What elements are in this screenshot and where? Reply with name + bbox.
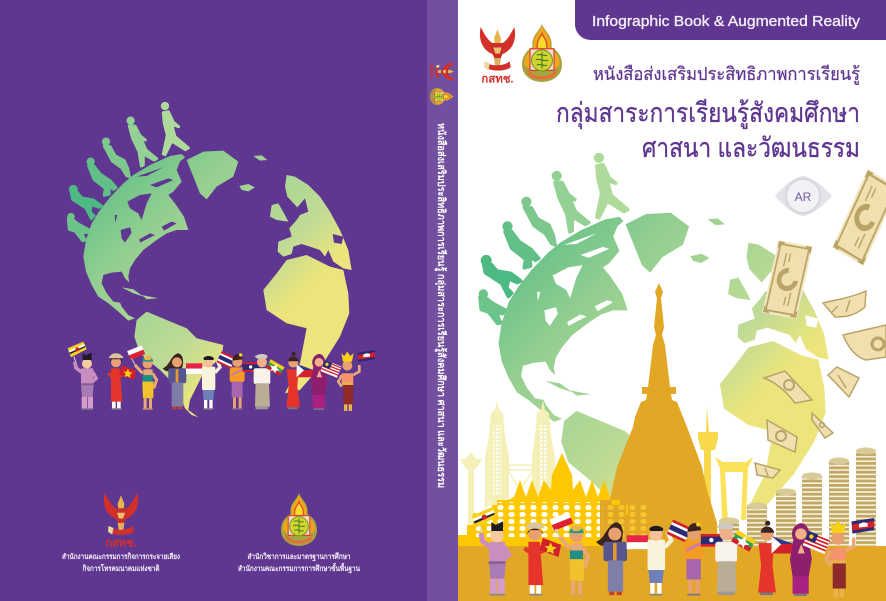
- icon: AR eye badge: [775, 176, 832, 216]
- text: ONBTC office name: กิจการโทรคมนาคมแห่งชาติ: [82, 563, 160, 573]
- banknote: small: [812, 413, 833, 438]
- landmark: airport tower: [460, 452, 482, 530]
- logo: spine seal: [430, 88, 454, 105]
- illustration: flying banknotes: [755, 170, 886, 478]
- landmark: KL tower: [698, 407, 718, 525]
- text: ONBTC office name: [62, 552, 180, 573]
- person: Malaysia: [311, 354, 342, 410]
- logo: Office of Basic Education seal, front cover: [522, 24, 562, 82]
- banknote: curled upper: [823, 291, 866, 317]
- person: Vietnam: [108, 353, 136, 410]
- banknote: curled mid: [764, 371, 812, 403]
- illustration: front cover globe with walking figures: [480, 155, 829, 541]
- banknote: bottom: [755, 463, 780, 478]
- panel: front cover background: [458, 0, 886, 601]
- text: Office of Basic Education name: [238, 552, 361, 574]
- text: header tab title: Infographic Book & Augmented Reality: [592, 14, 861, 30]
- logo: ONBTC garuda, front cover: [480, 27, 515, 86]
- text: AR: AR: [795, 190, 812, 204]
- illustration: golden stupa: [600, 283, 718, 546]
- person: Philippines: [286, 352, 313, 409]
- person: Brunei: [68, 342, 96, 410]
- text: spine title: หนังสือส่งเสริมประสิทธิภาพการเรียนรู้ กลุ่มสาระการเรียนรู้สังคมศึกษา ศาสนา และวัฒนธรรม: [434, 123, 448, 488]
- panel: book spine: [427, 0, 458, 601]
- panel: back cover background: [0, 0, 427, 601]
- person: Indonesia: [127, 345, 157, 410]
- person: cream shirt, Thailand flag: [202, 351, 235, 410]
- logo: Office of Basic Education seal, back cover: [281, 493, 317, 546]
- text: Office of Basic Education name: สำนักวิชาการและมาตรฐานการศึกษา: [248, 552, 350, 562]
- logo: spine garuda: [428, 63, 455, 80]
- group: ten ASEAN people with flags, front cover: [472, 507, 874, 597]
- banknote: centre: [763, 241, 812, 318]
- banknote: roll: [828, 367, 859, 397]
- ground band: [458, 546, 886, 601]
- text: ONBTC office name: สำนักงานคณะกรรมการกิจการกระจายเสียง: [62, 552, 180, 561]
- subtitle: หนังสือส่งเสริมประสิทธิภาพการเรียนรู้: [593, 64, 860, 85]
- walking figures evolution: [68, 103, 188, 241]
- person: long hair with jacket, Singapore flag: [163, 353, 202, 409]
- banknote: curled right: [843, 325, 886, 360]
- person: Myanmar: [254, 354, 285, 409]
- landmark: giant swing: [715, 457, 753, 520]
- illustration: temple: [458, 453, 656, 546]
- illustration: coin stacks: [719, 448, 876, 546]
- world map continents: [83, 151, 352, 417]
- group: ten ASEAN people with flags, back cover: [68, 342, 375, 411]
- illustration: city landmarks: [460, 400, 555, 530]
- person: Cambodia: [338, 350, 375, 411]
- logo: ONBTC garuda, back cover: [104, 493, 138, 549]
- banknote: large top right: [833, 170, 886, 265]
- illustration: back cover globe with walking figures: [68, 103, 352, 417]
- text: Office of Basic Education name: สำนักงานคณะกรรมการการศึกษาขั้นพื้นฐาน: [238, 562, 361, 574]
- banknote: lower: [767, 420, 797, 452]
- header tab: [575, 0, 886, 40]
- landmark: twin towers: [485, 400, 555, 520]
- person: Laos: [230, 353, 259, 410]
